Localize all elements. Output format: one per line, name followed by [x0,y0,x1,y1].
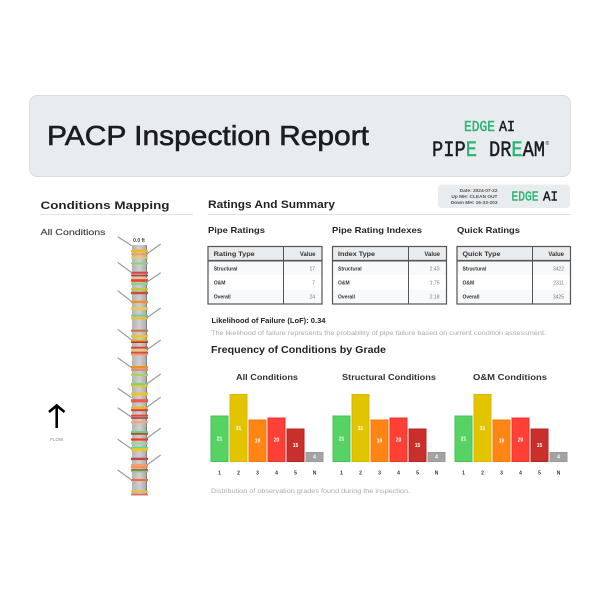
bar chart: O&M conditions: 15 [537,443,542,449]
table: pipe rating indexes: 2.18 [430,294,440,300]
bar chart: structural conditions: N [435,470,439,476]
table: pipe rating indexes: 1.75 [430,280,440,286]
heading: conditions mapping: Conditions Mapping [40,200,170,212]
info box: inspection details: EDGE [512,190,538,206]
pipe diagram [131,245,148,496]
table: pipe rating indexes: 2.43 [430,266,440,272]
bar chart: O&M conditions: 31 [480,426,485,432]
start distance label: 0.0 ft [133,238,145,244]
table: quick ratings: Quick Type [462,252,501,258]
logo: Edge AI Pipe Dream: DREAM [489,138,545,163]
table: pipe rating indexes: Structural [338,266,362,272]
info box: inspection details: Date: 2024-07-22 [460,188,498,194]
bar chart: all conditions [211,373,323,476]
logo: Edge AI Pipe Dream [432,119,550,163]
bar chart: O&M conditions: O&M Conditions [473,373,548,382]
bar chart: all conditions: 15 [293,443,298,449]
bar chart: all conditions: 21 [217,436,222,442]
logo: Edge AI Pipe Dream: ® [546,140,550,147]
bar chart: structural conditions: 20 [396,438,401,444]
bar chart: structural conditions: 5 [416,470,419,476]
table: quick ratings: O&M [462,280,474,286]
bar chart: all conditions: 1 [218,470,221,476]
table: pipe rating indexes: O&M [338,280,350,286]
bar chart: O&M conditions: 3 [500,470,503,476]
bar chart: all conditions: 2 [237,470,240,476]
table: pipe ratings: Structural [214,266,238,272]
header banner [30,96,570,176]
bar chart: all conditions: 3 [256,470,259,476]
table: quick ratings: 2311 [553,280,564,286]
bar chart: all conditions: 31 [236,426,241,432]
chart footnote: Distribution of observation grades found during the inspection. [211,488,410,495]
bar chart: O&M conditions: 20 [518,438,523,444]
logo: Edge AI Pipe Dream: EDGE [464,119,495,136]
bar chart: O&M conditions: 4 [557,454,560,460]
table: pipe rating indexes: Overall [338,294,356,300]
table: pipe ratings: Value [300,252,316,258]
table: pipe ratings: Rating Type [214,252,256,258]
heading: frequency of conditions by grade: Frequency of Conditions by Grade [211,344,386,356]
flow direction arrow: FLOW [50,437,64,442]
table: pipe rating indexes [332,225,446,304]
info box: inspection details: Down MH: 16-33-203 [451,200,498,206]
table: quick ratings [457,225,570,304]
bar chart: O&M conditions: 2 [481,470,484,476]
table: pipe ratings: O&M [214,280,225,286]
panel: conditions mapping [40,200,193,496]
table: quick ratings: Overall [462,294,480,300]
observation leader lines [118,237,161,480]
logo: Edge AI Pipe Dream: PIPE [432,138,477,163]
bar chart: O&M conditions: 5 [538,470,541,476]
info box: inspection details: AI [543,190,558,206]
table: pipe rating indexes: Pipe Rating Indexes [332,225,422,235]
bar chart: structural conditions: 19 [377,438,382,444]
bar chart: structural conditions: 3 [378,470,381,476]
table: quick ratings: Value [548,252,565,258]
bar chart: all conditions: N [313,470,317,476]
bar chart: all conditions: 4 [275,470,278,476]
bar chart: structural conditions: 15 [415,443,420,449]
info box: inspection details [438,184,570,208]
panel: ratings and summary [208,199,571,495]
bar chart: structural conditions: 1 [340,470,343,476]
bar chart: O&M conditions: 4 [519,470,522,476]
bar chart: all conditions: 20 [274,438,279,444]
bar chart: O&M conditions: 19 [499,438,504,444]
bar chart: O&M conditions: N [557,470,561,476]
table: pipe ratings: Pipe Ratings [208,225,265,235]
bar chart: structural conditions: 4 [435,454,438,460]
table: quick ratings: 3422 [553,266,564,272]
label: all conditions: All Conditions [40,228,106,237]
bar chart: structural conditions: 2 [359,470,362,476]
info box: inspection details: Up MH: CLEAN OUT [451,194,498,200]
table: pipe rating indexes: Index Type [338,252,376,258]
bar chart: structural conditions: 31 [358,426,363,432]
table: quick ratings: Quick Ratings [457,225,520,235]
bar chart: structural conditions: Structural Conditions [342,373,437,382]
title: PACP Inspection Report [47,120,369,151]
likelihood of failure description: The likelihood of failure represents the probability of pipe failure based on current condition assessment. [211,331,546,337]
bar chart: all conditions: 4 [313,454,316,460]
bar chart: all conditions: 19 [255,438,260,444]
flow direction arrow [49,406,64,442]
bar chart: structural conditions [333,373,445,476]
bar chart: O&M conditions: 1 [462,470,465,476]
likelihood of failure value: Likelihood of Failure (LoF): 0.34 [212,318,326,325]
heading: ratings and summary: Ratings And Summary [208,199,336,211]
table: pipe ratings: Overall [214,294,231,300]
table: pipe rating indexes: Value [424,252,441,258]
table: pipe ratings [208,225,322,304]
table: quick ratings: 3425 [553,294,564,300]
logo: Edge AI Pipe Dream: AI [499,119,515,136]
table: pipe ratings: 7 [312,280,315,286]
bar chart: O&M conditions [455,373,567,476]
bar chart: structural conditions: 21 [339,436,344,442]
bar chart: all conditions: 5 [294,470,297,476]
table: pipe ratings: 17 [309,266,315,272]
table: pipe ratings: 24 [309,294,315,300]
table: quick ratings: Structural [462,266,487,272]
bar chart: O&M conditions: 21 [461,436,466,442]
bar chart: all conditions: All Conditions [236,373,299,382]
bar chart: structural conditions: 4 [397,470,400,476]
